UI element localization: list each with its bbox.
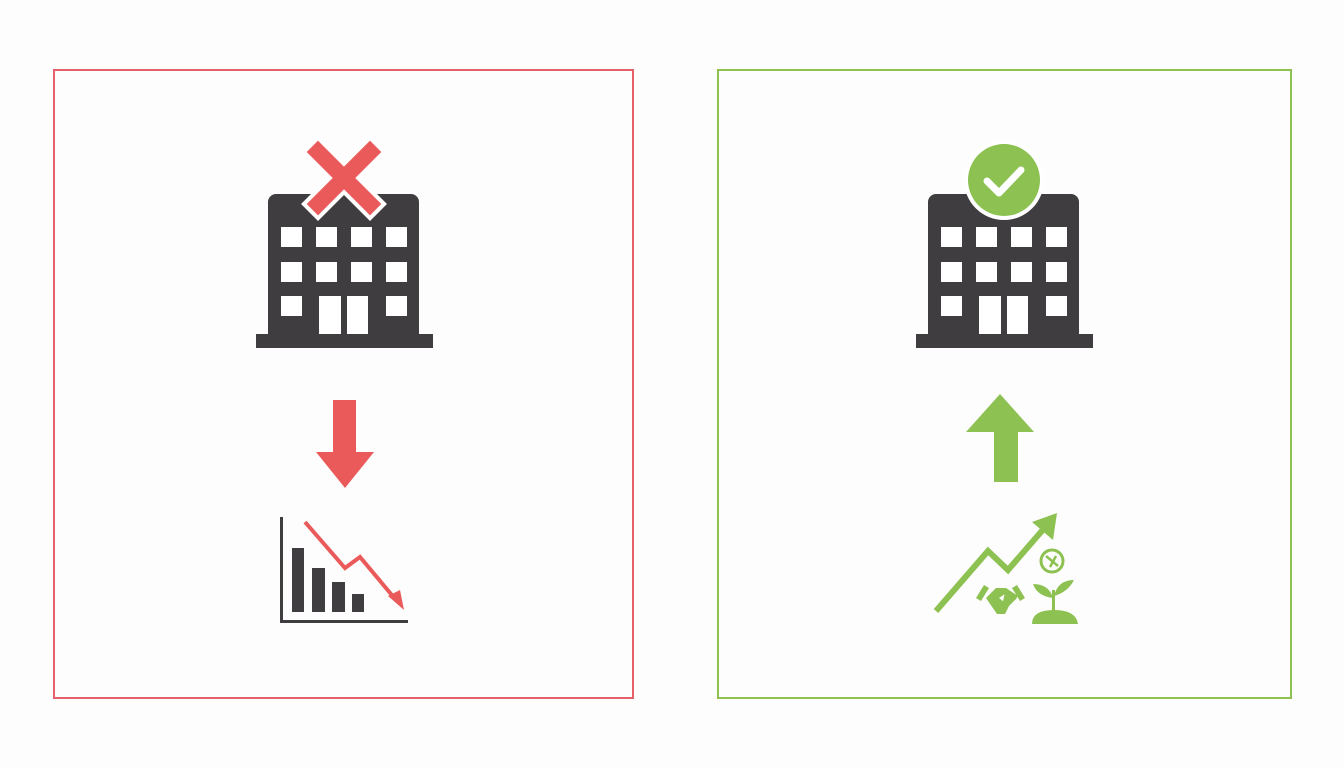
icon: declining chart — [280, 517, 408, 623]
arrow: down — [316, 400, 374, 488]
panel: positive — [718, 70, 1291, 698]
panel: negative — [54, 70, 633, 698]
arrow: up — [966, 394, 1034, 482]
icon: building with check — [916, 140, 1093, 348]
icon: growth, handshake, plant — [936, 513, 1078, 624]
icon: building with X — [256, 152, 433, 348]
